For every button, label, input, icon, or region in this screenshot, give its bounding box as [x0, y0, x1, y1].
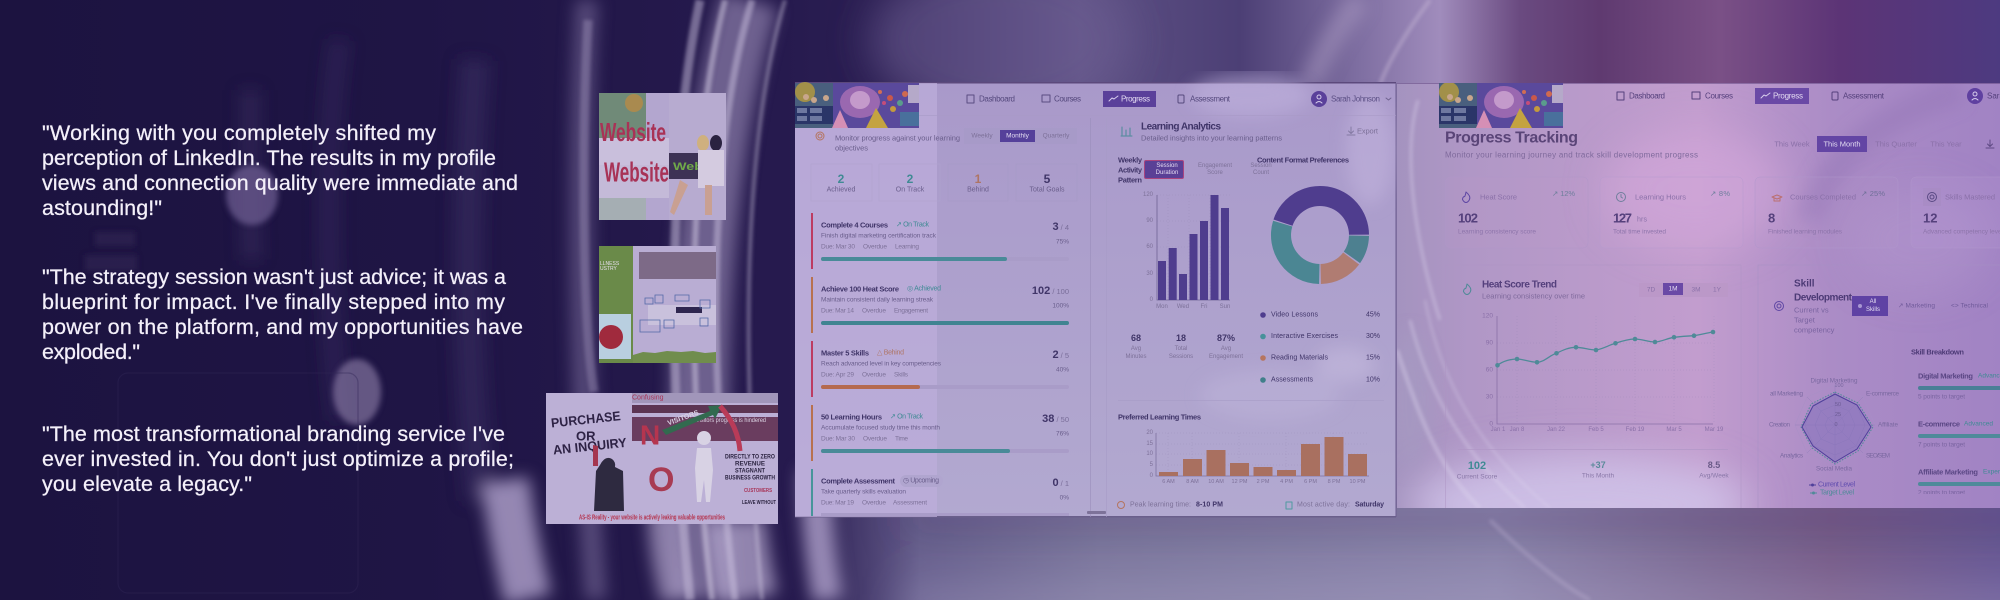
donut legend: Reading Materials [1271, 354, 1328, 362]
goal: complete 4 courses: Finish digital marketing certification track [821, 232, 937, 240]
skill development card: Development [1794, 292, 1853, 304]
analytics footer: Most active day: [1297, 502, 1350, 508]
weekly activity pattern bar chart: 30 [1146, 271, 1154, 277]
preferred learning times bar chart: 10 PM [1350, 479, 1366, 485]
thumbnail: website design: Web [673, 161, 703, 173]
heat score trend chart card: 3M [1691, 286, 1701, 294]
stat card: learning hours: Total time invested [1613, 228, 1666, 236]
goal summary cards: 5 [1044, 172, 1051, 186]
skill breakdown list: Advanced [1964, 420, 1993, 428]
radar chart: all Marketing [1770, 390, 1803, 398]
stat card: courses completed: 8 [1768, 210, 1775, 226]
goal: complete 4 courses: Due: Mar 30 [821, 244, 855, 250]
preferred learning times bar chart: 8 AM [1186, 479, 1199, 485]
radar chart: SEO/SEM [1866, 452, 1890, 460]
goal: complete assessment: Overdue [862, 500, 886, 506]
weekly activity pattern bar chart: Session [1156, 163, 1178, 169]
donut legend [1260, 312, 1380, 384]
preferred learning times bar chart: 2 PM [1257, 479, 1270, 485]
radar chart: 0 [1834, 422, 1838, 428]
radar chart: Analytics [1780, 452, 1803, 460]
goal: complete 4 courses: Learning [895, 244, 919, 250]
goal tracker header: Quarterly [1043, 132, 1070, 140]
quote 1 [42, 121, 518, 220]
weekly activity pattern bar chart: Fri [1200, 304, 1208, 310]
heat score trend chart card: Mar 19 [1705, 427, 1724, 433]
stat card: skills mastered [1911, 177, 2000, 248]
thumbnail: confusing funnel: AN INQUIRY [552, 435, 628, 457]
stat card: heat score [1446, 177, 1588, 248]
period selector: This Week [1774, 140, 1810, 148]
goal: 50 learning hours: Due: Mar 30 [821, 436, 855, 442]
heat score trend chart card: 1Y [1713, 286, 1722, 294]
radar chart: Social Media [1816, 466, 1853, 472]
goal: complete 4 courses: 3 / 4 [1052, 221, 1069, 233]
thumbnail: confusing funnel: BUSINESS GROWTH [725, 474, 775, 482]
analytics footer [1118, 502, 1384, 509]
preferred learning times bar chart: 10 [1146, 451, 1154, 457]
thumbnail: confusing funnel [546, 393, 778, 524]
goal: achieve 100 heat score: Due: Mar 14 [821, 308, 854, 314]
goal: complete 4 courses: Overdue [863, 244, 887, 250]
preferred learning times bar chart: Preferred Learning Times [1118, 412, 1201, 422]
thumbnail: confusing funnel: N [640, 420, 660, 450]
quote 2: "The strategy session wasn't just advice; it was a [42, 265, 506, 289]
goal: master 5 skills: Reach advanced level in key competencies [821, 360, 942, 368]
analytics footer: Saturday [1355, 502, 1384, 508]
weekly activity pattern bar chart: Sun [1220, 304, 1230, 310]
skill breakdown list: 5 points to target [1918, 394, 1965, 400]
quote 2: exploded." [42, 340, 140, 364]
heat score trend chart card: Mar 5 [1666, 427, 1682, 433]
goal: 50 learning hours: 38 / 50 [1042, 413, 1069, 425]
navigation bar: Assessment [1190, 94, 1231, 104]
skill development card: Target [1794, 316, 1816, 324]
radar chart: 50 [1835, 402, 1841, 408]
stat card: heat score: Learning consistency score [1458, 228, 1536, 236]
skill development card: Skills [1866, 307, 1880, 313]
goal tracker header: Monthly [1006, 132, 1030, 140]
heat score trend chart card: 60 [1486, 366, 1493, 374]
skill breakdown list: Skill Breakdown [1911, 348, 1964, 356]
navigation bar: Progress [1121, 94, 1150, 104]
activity statistics: Total [1175, 346, 1187, 352]
stat card: learning hours: 127 [1613, 210, 1632, 226]
heat score trend chart card: Avg/Week [1699, 472, 1729, 480]
goal summary cards: 1 [975, 172, 982, 186]
weekly activity pattern bar chart: Pattern [1118, 176, 1142, 184]
radar chart: Creation [1769, 422, 1790, 428]
goal: 50 learning hours: Overdue [863, 436, 887, 442]
heat score trend chart card [1446, 265, 1741, 515]
heat score trend chart card: +37 [1590, 460, 1606, 470]
period selector: This Month [1823, 140, 1861, 148]
navigation bar [967, 91, 1391, 107]
skill breakdown list: Affiliate Marketing [1918, 468, 1978, 476]
scrollbar thumb [1087, 511, 1106, 514]
donut legend: 45% [1366, 312, 1380, 318]
quote 1: perception of LinkedIn. The results in my profile [42, 146, 496, 170]
weekly activity pattern bar chart: Session [1250, 163, 1272, 169]
radar chart: Affiliate [1878, 422, 1898, 428]
goal: achieve 100 heat score: Overdue [862, 308, 886, 314]
goal: complete 4 courses: ↗ On Track [896, 222, 930, 228]
quote 2: blueprint for impact. I've finally stepped into my [42, 290, 505, 314]
skill breakdown list: 2 points to target [1918, 490, 1965, 496]
heat score trend chart card: 1M [1668, 286, 1678, 292]
donut legend: 30% [1366, 333, 1380, 340]
goal: 50 learning hours [811, 405, 1069, 461]
radar chart [1769, 378, 1899, 496]
quote 2 [42, 265, 523, 364]
goal: complete 4 courses: 75% [1056, 238, 1069, 246]
goal: complete assessment: ◷ Upcoming [903, 478, 939, 484]
stat card: heat score: 102 [1458, 210, 1478, 226]
activity statistics: Avg [1221, 346, 1231, 352]
goal: 50 learning hours: 50 Learning Hours [821, 412, 882, 422]
logo banner [795, 82, 919, 128]
skill development card: competency [1794, 326, 1835, 334]
donut legend: Interactive Exercises [1271, 333, 1338, 340]
panel: goal tracker dashboard [795, 73, 1396, 518]
goal: complete assessment: Due: Mar 19 [821, 500, 854, 506]
goal: master 5 skills [811, 341, 1069, 397]
goal: complete assessment: Complete Assessment [821, 476, 896, 486]
thumbnail: confusing funnel: CUSTOMERS [744, 488, 773, 494]
title [1445, 130, 1698, 160]
goal: achieve 100 heat score: Achieve 100 Heat Score [821, 284, 899, 294]
title: Progress Tracking [1445, 130, 1578, 146]
heat score trend chart card: Jan 8 [1510, 427, 1525, 433]
thumbnail: website design [599, 93, 726, 220]
weekly activity pattern bar chart: Engagement [1198, 163, 1232, 169]
preferred learning times bar chart: 4 PM [1280, 479, 1293, 485]
learning analytics header: Export [1357, 126, 1379, 136]
skill development card: All [1870, 299, 1876, 305]
weekly activity pattern bar chart [1118, 156, 1272, 310]
heat score trend chart card: 30 [1486, 394, 1493, 400]
skill development card: <> Technical [1951, 302, 1989, 310]
heat score trend chart card: 0 [1489, 420, 1493, 428]
stat card: heat score: ↗ 12% [1552, 189, 1575, 198]
preferred learning times bar chart: 12 PM [1232, 479, 1248, 485]
weekly activity pattern bar chart: Mon [1156, 304, 1168, 310]
stat card: courses completed: Courses Completed [1790, 192, 1856, 202]
weekly activity pattern bar chart: Activity [1118, 166, 1143, 174]
activity statistics: 18 [1176, 333, 1186, 343]
stat card: heat score: Heat Score [1480, 192, 1517, 202]
thumbnail: confusing funnel: PURCHASE [550, 408, 622, 430]
goal: achieve 100 heat score [811, 277, 1069, 333]
learning analytics header: Learning Analytics [1141, 122, 1221, 132]
goal tracker header [816, 128, 1077, 152]
navigation bar: Courses [1705, 92, 1733, 100]
thumbnail: confusing funnel: AS-IS Reality - your website is actively leaking valuable opportunities [579, 514, 725, 522]
goal: master 5 skills: Due: Apr 29 [821, 372, 854, 378]
content format donut chart: Content Format Preferences [1257, 156, 1349, 164]
goal: 50 learning hours: Accumulate focused study time this month [821, 424, 940, 432]
testimonial quotes [42, 121, 523, 496]
weekly activity pattern bar chart: Score [1207, 170, 1223, 176]
donut legend: Video Lessons [1271, 312, 1318, 318]
activity statistics: 68 [1131, 333, 1141, 343]
stat card: courses completed: ↗ 25% [1861, 189, 1885, 198]
weekly activity pattern bar chart: 60 [1146, 244, 1154, 250]
goal: complete 4 courses: Complete 4 Courses [821, 220, 888, 230]
donut legend: Assessments [1271, 376, 1314, 384]
goal: 50 learning hours: 76% [1056, 430, 1069, 438]
preferred learning times bar chart [1118, 412, 1369, 485]
skill development card: ↗ Marketing [1898, 302, 1935, 310]
heat score trend chart card: Feb 5 [1588, 427, 1604, 433]
quote 1: "Working with you completely shifted my [42, 121, 436, 145]
content format donut chart [1257, 156, 1369, 284]
quote 3 [42, 422, 514, 496]
preferred learning times bar chart: 5 [1150, 462, 1154, 468]
stat card: learning hours: hrs [1637, 216, 1648, 224]
quote 3: ever invested in. You don't just optimize a profile; [42, 447, 514, 471]
donut legend: 10% [1366, 376, 1380, 384]
goal: 50 learning hours: ↗ On Track [890, 414, 924, 420]
heat score trend chart card: Feb 19 [1626, 427, 1645, 433]
goal summary cards: Total Goals [1029, 186, 1065, 194]
goal: master 5 skills: Overdue [862, 372, 886, 378]
goal summary cards: Achieved [827, 186, 856, 194]
skill breakdown list [1911, 348, 2000, 496]
navigation bar: Courses [1054, 94, 1081, 104]
thumbnail: confusing funnel: VISITORS [667, 409, 700, 427]
panel: progress tracking dashboard [1397, 83, 2000, 508]
stat card: skills mastered: 12 [1923, 210, 1937, 226]
preferred learning times bar chart: 10 AM [1208, 479, 1224, 485]
heat score trend chart card: Jan 22 [1547, 427, 1566, 433]
preferred learning times bar chart: 6 AM [1162, 479, 1175, 485]
thumbnail: confusing funnel: REVENUE [735, 460, 766, 468]
goal: master 5 skills: 40% [1056, 366, 1069, 374]
quote 3: "The most transformational branding service I've [42, 422, 505, 446]
stat card: learning hours: ↗ 8% [1710, 189, 1730, 198]
stat card: courses completed: Finished learning modules [1768, 228, 1843, 236]
navigation bar [1617, 88, 2000, 104]
analytics footer: 8-10 PM [1196, 502, 1223, 508]
goal: master 5 skills: Skills [894, 372, 909, 378]
goal tracker header: Monitor progress against your learning [835, 134, 960, 142]
activity statistics: Minutes [1125, 354, 1147, 360]
thumbnail: website design: Website [600, 117, 666, 147]
heat score trend chart card: Current Score [1457, 474, 1498, 480]
thumbnail: confusing funnel: Confusing [632, 394, 664, 402]
radar chart: Current Level [1818, 482, 1855, 488]
thumbnail: confusing funnel: STAGNANT [735, 468, 765, 474]
stat card: skills mastered: Skills Mastered [1945, 192, 1995, 202]
donut legend: 15% [1366, 354, 1380, 362]
goal: complete assessment: 0 / 1 [1052, 477, 1069, 489]
heat score trend chart card: 120 [1482, 312, 1493, 320]
skill breakdown list: 7 points to target [1918, 442, 1965, 448]
goal: achieve 100 heat score: ◎ Achieved [907, 286, 941, 292]
goal summary cards: Behind [967, 186, 989, 194]
skill breakdown list: Digital Marketing [1918, 372, 1973, 380]
goal: achieve 100 heat score: 100% [1052, 302, 1069, 310]
skill development card [1758, 265, 2000, 515]
navigation bar: Progress [1773, 92, 1803, 100]
period selector: This Year [1930, 140, 1962, 148]
thumbnail: website design: Website [604, 156, 669, 188]
activity statistics [1125, 333, 1243, 360]
thumbnail: wellness study: USTRY [600, 266, 618, 272]
heat score trend chart card: Heat Score Trend [1482, 280, 1557, 290]
analytics footer: Peak learning time: [1130, 502, 1191, 508]
preferred learning times bar chart: 0 [1150, 473, 1154, 479]
heat score trend chart card: 8.5 [1708, 460, 1720, 470]
goal: complete 4 courses [811, 213, 1069, 269]
goal tracker header: Weekly [971, 132, 993, 140]
activity statistics: Avg [1131, 346, 1141, 352]
weekly activity pattern bar chart: Count [1253, 170, 1269, 176]
goal summary cards: On Track [896, 186, 925, 194]
heat score trend chart card: 90 [1486, 340, 1493, 346]
thumbnail: confusing funnel: OR [576, 428, 596, 444]
skill breakdown list: E-commerce [1918, 420, 1960, 428]
goal: master 5 skills: Master 5 Skills [821, 348, 869, 358]
goal summary cards [811, 164, 1077, 201]
thumbnail: wellness study: LLNESS [600, 261, 620, 267]
radar chart: Digital Marketing [1811, 378, 1858, 384]
period selector: This Quarter [1875, 140, 1917, 148]
goal: complete assessment [811, 469, 1069, 516]
weekly activity pattern bar chart: 120 [1143, 192, 1154, 198]
radar chart: Target Level [1820, 490, 1854, 496]
learning analytics header: Detailed insights into your learning patterns [1141, 134, 1282, 142]
heat score trend chart card: 102 [1468, 460, 1486, 472]
preferred learning times bar chart: 20 [1146, 430, 1154, 436]
quote 2: power on the platform, and my opportunities have [42, 315, 523, 339]
radar chart: 25 [1835, 412, 1841, 418]
goal: achieve 100 heat score: 102 / 100 [1032, 285, 1069, 297]
navigation bar: Dashboard [1629, 92, 1665, 100]
thumbnail: confusing funnel: DIRECTLY TO ZERO [725, 454, 775, 460]
goal: 50 learning hours: Time [895, 436, 908, 442]
logo banner [1439, 82, 1563, 128]
goal: complete assessment: Assessment [893, 500, 927, 506]
thumbnail: confusing funnel: Visitors progress is hindered [696, 418, 766, 424]
heat score trend chart card: Jan 1 [1491, 427, 1506, 433]
heat score trend chart card: Learning consistency over time [1482, 292, 1585, 300]
thumbnail: confusing funnel: O [648, 461, 674, 499]
goal summary cards: 2 [907, 172, 914, 186]
heat score trend chart card: This Month [1582, 472, 1614, 480]
navigation bar: Sarah Johnson [1331, 94, 1380, 104]
stat card: courses completed [1755, 177, 1898, 248]
learning analytics header [1121, 122, 1379, 142]
stat card: learning hours [1600, 177, 1743, 248]
title: Monitor your learning journey and track skill development progress [1445, 150, 1698, 160]
goal: master 5 skills: 2 / 5 [1052, 349, 1069, 361]
navigation bar: Dashboard [979, 94, 1015, 104]
navigation bar: Assessment [1843, 92, 1885, 100]
radar chart: 100 [1834, 383, 1844, 389]
goal: achieve 100 heat score: Engagement [894, 308, 928, 314]
radar chart: E-commerce [1866, 390, 1899, 398]
quote 1: astounding!" [42, 196, 162, 220]
skill development card: Skill [1794, 278, 1815, 290]
weekly activity pattern bar chart: 0 [1150, 297, 1154, 303]
preferred learning times bar chart: 15 [1146, 441, 1154, 447]
period selector [1774, 136, 1994, 152]
goal summary cards: 2 [838, 172, 845, 186]
activity statistics: Sessions [1169, 354, 1193, 360]
goal: master 5 skills: △ Behind [877, 350, 904, 356]
heat score trend chart card: 7D [1647, 286, 1655, 294]
goal: complete assessment: Take quarterly skills evaluation [821, 488, 906, 496]
weekly activity pattern bar chart: Wed [1177, 304, 1189, 310]
goal tracker header: objectives [835, 144, 868, 152]
stat card: learning hours: Learning Hours [1635, 192, 1686, 202]
thumbnail: confusing funnel: LEAVE WITHOUT [742, 500, 776, 506]
weekly activity pattern bar chart: 90 [1146, 218, 1154, 224]
skill development card: Current vs [1794, 306, 1829, 314]
activity statistics: 87% [1217, 333, 1235, 343]
weekly activity pattern bar chart: Weekly [1118, 156, 1143, 164]
goal: complete assessment: 0% [1060, 494, 1069, 502]
preferred learning times bar chart: 6 PM [1304, 479, 1317, 485]
preferred learning times bar chart: 8 PM [1328, 479, 1341, 485]
quote 1: views and connection quality were immediate and [42, 171, 518, 195]
goal: achieve 100 heat score: Maintain consistent daily learning streak [821, 296, 934, 304]
activity statistics: Engagement [1209, 354, 1243, 360]
quote 3: you elevate a legacy." [42, 472, 252, 496]
weekly activity pattern bar chart: Duration [1156, 170, 1178, 176]
thumbnail: wellness study [599, 246, 716, 363]
